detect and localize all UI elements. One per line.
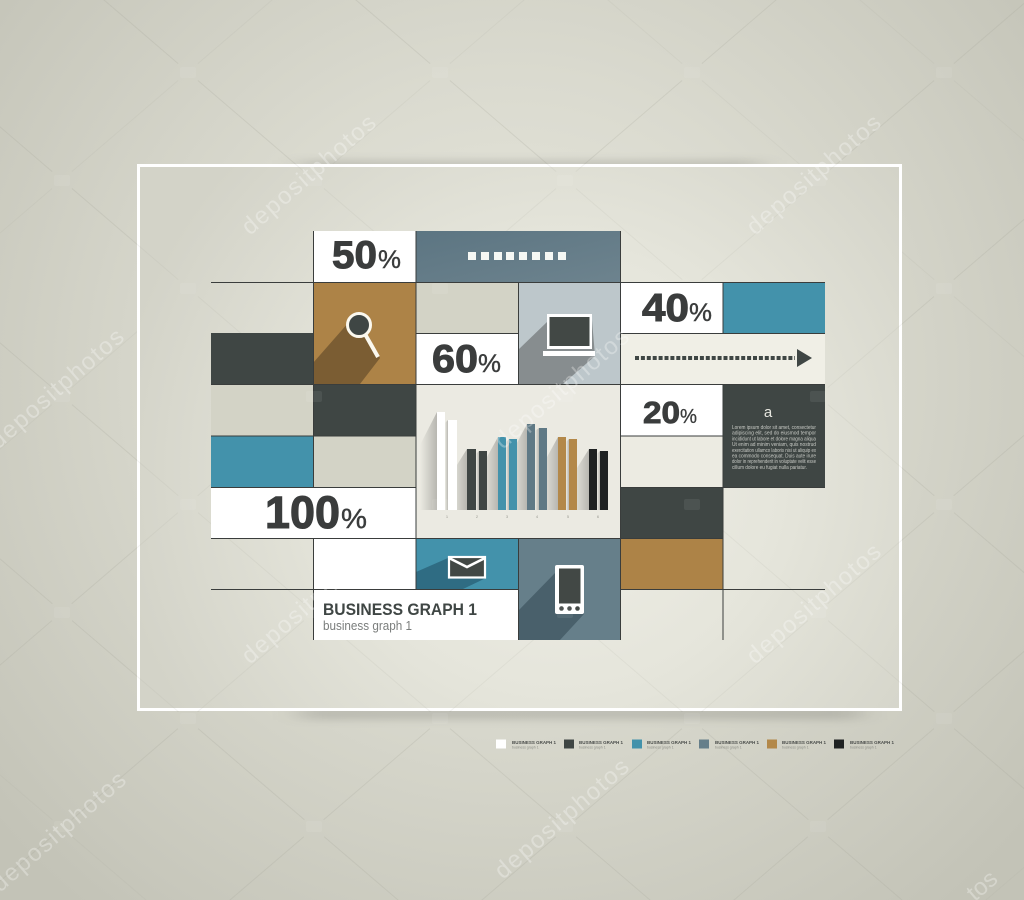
cell: 40 percent bbox=[620, 282, 723, 333]
cell: dotted arrow bbox=[620, 333, 825, 384]
axis labels: 4 bbox=[536, 514, 539, 519]
cell: beige bbox=[416, 282, 518, 333]
frame shadows bbox=[300, 160, 860, 720]
legend item 3 bbox=[632, 740, 691, 750]
axis labels: 6 bbox=[597, 514, 600, 519]
cell: phone on slate bbox=[518, 538, 620, 640]
cell: pale right bbox=[620, 436, 723, 487]
stock watermark overlays: depositphotos bbox=[489, 753, 634, 885]
grid lines bbox=[211, 231, 825, 640]
chart grid bbox=[211, 231, 825, 640]
text block panel: cillum dolore eu fugiat nulla pariatur. bbox=[732, 465, 807, 471]
legend item 6: BUSINESS GRAPH 1 bbox=[850, 740, 894, 746]
frame panel bbox=[138, 166, 900, 710]
legend item 3: BUSINESS GRAPH 1 bbox=[647, 740, 691, 746]
legend item 2: business graph 1 bbox=[579, 746, 606, 750]
cell: 100 percent: % bbox=[341, 503, 367, 534]
cell: 60 percent bbox=[416, 333, 518, 384]
text block panel: ea commodo consequat. Duis aute irure bbox=[732, 454, 816, 460]
title block: BUSINESS GRAPH 1 bbox=[323, 600, 477, 619]
legend item 4 bbox=[699, 740, 759, 750]
legend item 1: business graph 1 bbox=[512, 746, 539, 750]
legend item 1 bbox=[496, 740, 556, 750]
cell: teal left bbox=[211, 436, 313, 487]
axis labels: 5 bbox=[567, 514, 570, 519]
cell: slate header with dots bbox=[416, 231, 620, 282]
bar shadows bbox=[420, 412, 600, 510]
cell: 50 percent bbox=[313, 231, 416, 282]
text block panel: Lorem ipsum dolor sit amet, consectetur bbox=[732, 425, 816, 431]
legend item 3: business graph 1 bbox=[647, 746, 674, 750]
cell: 40 percent: % bbox=[689, 299, 712, 327]
text block panel bbox=[723, 384, 825, 487]
cell: 50 percent: 50 bbox=[332, 234, 377, 277]
text block panel: incididunt ut labore et dolore magna aliqua bbox=[732, 436, 816, 442]
legend item 1: BUSINESS GRAPH 1 bbox=[512, 740, 556, 746]
legend item 4: business graph 1 bbox=[715, 746, 742, 750]
cell: teal bbox=[723, 282, 825, 333]
stock watermark overlays: depositphotos bbox=[741, 538, 886, 670]
legend item 6 bbox=[834, 740, 894, 750]
cell: 20 percent: 20 bbox=[643, 395, 680, 430]
legend item 2 bbox=[564, 740, 623, 750]
cell: dark middle bbox=[313, 384, 416, 436]
stock watermark camera marks bbox=[54, 67, 952, 832]
legend item 4: BUSINESS GRAPH 1 bbox=[715, 740, 759, 746]
bars bbox=[437, 412, 445, 510]
legend item 5: business graph 1 bbox=[782, 746, 809, 750]
cell: 60 percent: 60 bbox=[432, 338, 478, 381]
stock watermark overlays: depositphotos bbox=[489, 323, 634, 455]
text block panel: a bbox=[764, 404, 773, 421]
cell: dark left bbox=[211, 333, 313, 384]
title block bbox=[313, 589, 518, 640]
axis labels: 3 bbox=[506, 514, 509, 519]
cell: 20 percent: % bbox=[680, 406, 697, 428]
stock watermark overlays: depositphotos bbox=[236, 109, 381, 241]
cell: 60 percent: % bbox=[478, 350, 501, 378]
cell: 100 percent: 100 bbox=[265, 487, 340, 538]
legend item 2: BUSINESS GRAPH 1 bbox=[579, 740, 623, 746]
text block panel: adipiscing elit, sed do eiusmod tempor bbox=[732, 431, 816, 437]
stock watermark overlays: depositphotos bbox=[236, 538, 381, 670]
cell: 100 percent bbox=[211, 487, 416, 538]
legend bbox=[496, 740, 894, 750]
cell: white empty bbox=[313, 538, 416, 589]
cell: laptop on light slate bbox=[518, 282, 620, 384]
bar chart panel bbox=[416, 384, 620, 538]
stock watermark overlays: depositphotos bbox=[741, 109, 886, 241]
cell: 40 percent: 40 bbox=[642, 287, 689, 330]
cell: envelope on teal bbox=[416, 538, 518, 589]
cell: dark right bbox=[620, 487, 723, 538]
axis labels: 2 bbox=[476, 514, 479, 519]
cell: beige left bbox=[211, 384, 313, 436]
axis labels: 1 bbox=[446, 514, 449, 519]
title block: business graph 1 bbox=[323, 619, 412, 633]
cell: 50 percent: % bbox=[378, 246, 401, 274]
text block panel: exercitation ullamco laboris nisi ut aliquip ex bbox=[732, 448, 816, 454]
legend item 5 bbox=[767, 740, 826, 750]
legend item 6: business graph 1 bbox=[850, 746, 877, 750]
cell: brown right bbox=[620, 538, 723, 589]
cell: beige middle bbox=[313, 436, 416, 487]
legend item 5: BUSINESS GRAPH 1 bbox=[782, 740, 826, 746]
text block panel: dolor in reprehenderit in voluptate velit esse bbox=[732, 459, 816, 465]
axis labels bbox=[446, 514, 600, 519]
text block panel: Ut enim ad minim veniam, quis nostrud bbox=[732, 442, 816, 448]
cell: 20 percent bbox=[620, 384, 723, 436]
cell: magnifier on brown bbox=[313, 282, 416, 384]
